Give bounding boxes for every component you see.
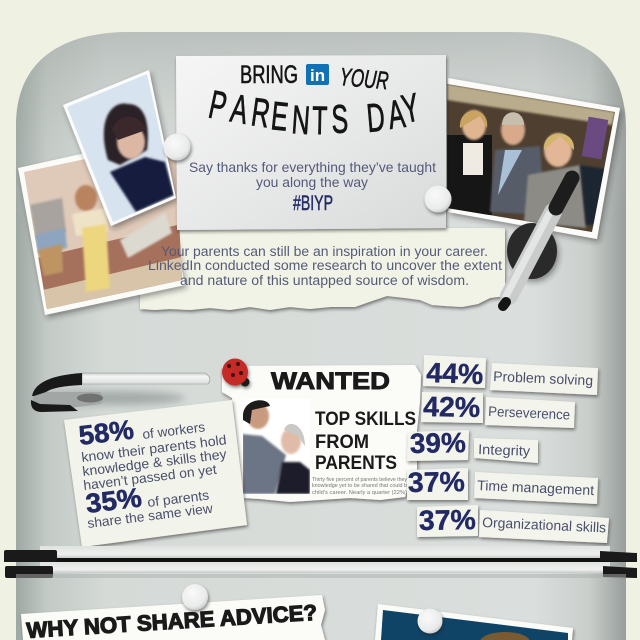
poster heading: top skills from parents: FROM: [315, 432, 369, 453]
poster heading: top skills from parents: [315, 409, 416, 474]
sticky note: 58% and 35% stats: of parents: [147, 488, 210, 510]
skill row: problem solving 44%: Problem solving: [493, 368, 593, 388]
heading: parents day: E: [269, 94, 290, 140]
heading: bring in your: BRING: [240, 61, 298, 89]
paper: why not share advice: [21, 595, 325, 640]
skill row: perseverence 42%: Perseverence: [488, 403, 571, 423]
door gap and chrome trim: [4, 546, 637, 578]
sticky note: 58% and 35% stats: share the same view: [87, 501, 214, 531]
poster small print: [312, 477, 408, 496]
magnet: white right: [424, 186, 452, 212]
heading: bring in your: [240, 61, 390, 95]
skill row: organizational skills 37%: 37%: [419, 504, 476, 536]
skill row: time management 37%: [407, 466, 598, 504]
fridge handle: [31, 373, 210, 412]
photo: young girl portrait: [60, 70, 180, 226]
heading: parents day: S: [331, 98, 349, 143]
skill row: integrity 39%: Integrity: [478, 441, 530, 459]
intro text: [148, 244, 502, 288]
torn note paper: [140, 228, 505, 310]
wanted heading: WANTED: [271, 368, 390, 395]
heading: parents day: P: [205, 83, 230, 130]
subtitle: Say thanks for everything they’ve taught: [189, 159, 436, 175]
skill row: organizational skills 37%: [417, 504, 609, 543]
skill row: problem solving 44%: 44%: [426, 357, 484, 390]
heading: parents day: N: [290, 98, 311, 144]
sticky note: 58% and 35% stats: know their parents hold: [81, 432, 227, 465]
heading: parents day: A: [227, 87, 252, 133]
skill row: problem solving 44%: [423, 355, 598, 395]
heading: parents day: R: [249, 90, 273, 137]
ladybug magnet: [222, 358, 250, 386]
photo: son and mother: [242, 398, 310, 494]
heading: parents day: Y: [398, 86, 423, 132]
sticky note: 58% and 35% stats: [64, 400, 247, 547]
skill row: time management 37%: 37%: [408, 466, 465, 498]
heading: bring in your: YOUR: [338, 63, 390, 95]
poster small print: Thirty five percent of parents believe they: [312, 477, 408, 483]
photo: lower right: [375, 604, 575, 640]
skill row: time management 37%: Time management: [477, 477, 595, 498]
poster small print: child’s career. Nearly a quarter (22%): [312, 490, 407, 496]
sticky note: 58% and 35% stats: of workers: [142, 419, 206, 442]
magnet: white lower left: [182, 584, 208, 610]
skill row: integrity 39%: 39%: [410, 427, 466, 459]
skill row: perseverence 42%: [421, 391, 575, 428]
magnet: white left: [164, 134, 190, 160]
sticky note: 58% and 35% stats: knowledge & skills they: [82, 446, 228, 479]
skill row: organizational skills 37%: Organizational skills: [482, 514, 606, 535]
poster small print: knowledge yet to be shared that could b: [312, 483, 407, 489]
heading: bring in your: in: [310, 66, 325, 85]
photo: toddler in yellow overalls: [18, 135, 190, 320]
subtitle: you along the way: [256, 174, 368, 190]
tape strip: [120, 213, 172, 258]
subtitle: [189, 159, 436, 190]
poster heading: top skills from parents: TOP SKILLS: [315, 409, 416, 430]
intro text: LinkedIn conducted some research to uncover the extent: [148, 258, 502, 273]
hashtag: #BIYP: [293, 192, 333, 215]
title card: [176, 55, 446, 230]
sticky note: 58% and 35% stats: 35%: [84, 482, 143, 519]
intro text: Your parents can still be an inspiration in your career.: [161, 244, 488, 259]
skill row: perseverence 42%: 42%: [423, 391, 481, 423]
heading: parents day: D: [365, 96, 387, 142]
heading: parents day: [205, 83, 423, 144]
sticky note: 58% and 35% stats: haven’t passed on yet: [83, 462, 218, 493]
marker and black magnet: [503, 178, 572, 306]
sticky note: 58% and 35% stats: 58%: [77, 414, 135, 451]
wanted poster: [222, 365, 421, 502]
intro text: and nature of this untapped source of wisdom.: [180, 273, 469, 288]
skill row: integrity 39%: [407, 427, 538, 463]
heading: parents day: T: [312, 99, 328, 144]
photo: LinkedIn colleagues with parents: [445, 78, 620, 240]
magnet: white lower right: [418, 608, 442, 634]
heading: parents day: A: [385, 92, 408, 139]
poster heading: top skills from parents: PARENTS: [315, 453, 397, 474]
